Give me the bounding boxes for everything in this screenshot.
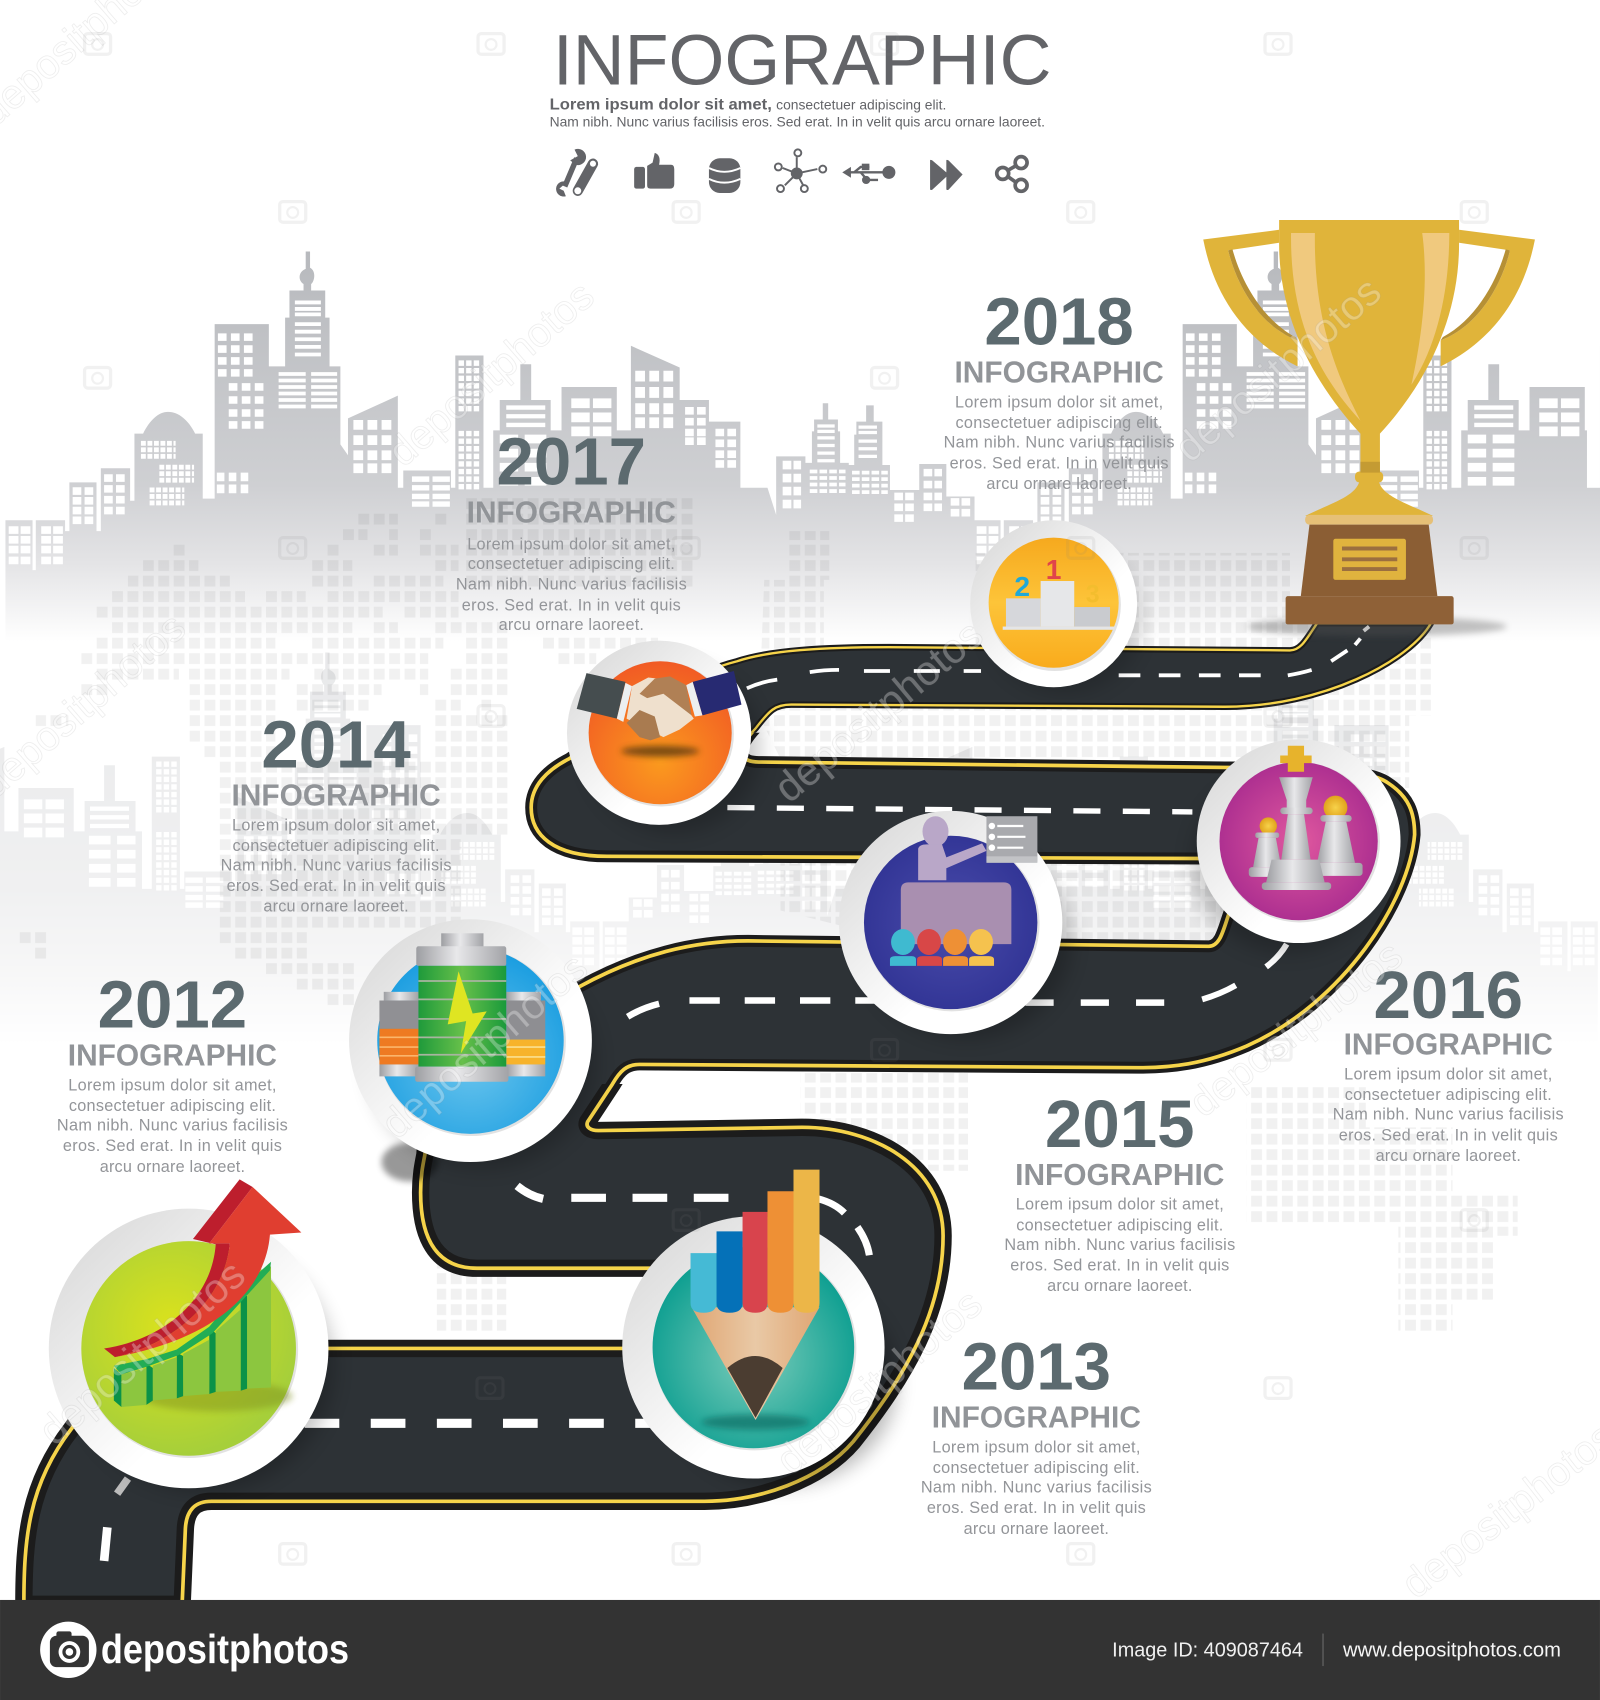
background: upper city skyline (5, 251, 1600, 642)
year 2014: 2014 (261, 707, 411, 782)
text block 2014: consectetuer adipiscing elit. (233, 837, 440, 855)
text block 2017: INFOGRAPHIC (467, 494, 676, 529)
text block 2014: Nam nibh. Nunc varius facilisis (221, 856, 452, 874)
text block 2013: arcu ornare laoreet. (964, 1520, 1109, 1538)
text block 2018: INFOGRAPHIC (954, 355, 1164, 390)
podium numbers: 1 (1046, 553, 1061, 585)
subtitle text: Lorem ipsum dolor sit amet, (550, 96, 772, 113)
icon row (556, 149, 1027, 197)
text block 2017: Nam nibh. Nunc varius facilisis (456, 576, 687, 594)
text block 2016: eros. Sed erat. In in velit quis (1339, 1126, 1558, 1144)
footer image id: Image ID: 409087464 (1112, 1639, 1303, 1661)
icon: share (997, 157, 1027, 191)
footer logo camera icon (40, 1622, 96, 1678)
text block 2018 (944, 285, 1175, 493)
presentation board (901, 882, 1011, 944)
footer website: www.depositphotos.com (1342, 1639, 1561, 1661)
icon: fast forward (930, 160, 963, 190)
text block 2012: consectetuer adipiscing elit. (69, 1097, 276, 1115)
stop 2014: battery (349, 919, 596, 1182)
text block 2016: consectetuer adipiscing elit. (1345, 1086, 1552, 1104)
stock photo watermarks: depositphotos (767, 1280, 991, 1483)
trophy (1203, 220, 1535, 636)
battery left (379, 992, 418, 1076)
text block 2014: INFOGRAPHIC (231, 777, 441, 812)
background: dotted world map (20, 496, 1518, 1333)
text block 2014: eros. Sed erat. In in velit quis (227, 877, 446, 895)
text block 2018: eros. Sed erat. In in velit quis (950, 454, 1169, 472)
text block 2013: INFOGRAPHIC (932, 1400, 1141, 1435)
year 2015: 2015 (1045, 1087, 1195, 1162)
icon: usb (842, 164, 895, 184)
text block 2018: consectetuer adipiscing elit. (956, 414, 1163, 432)
text block 2016 (1333, 958, 1564, 1165)
text block 2014: Lorem ipsum dolor sit amet, (232, 816, 440, 834)
podium numbers: 3 (1086, 581, 1100, 609)
trophy cup (1279, 220, 1459, 473)
trophy handles (1203, 230, 1535, 366)
stock photo watermarks: depositphotos (30, 1251, 254, 1454)
text block 2014: arcu ornare laoreet. (263, 898, 409, 916)
text block 2012: Nam nibh. Nunc varius facilisis (57, 1117, 288, 1135)
road lane markings (104, 627, 1369, 1561)
text block 2015: Nam nibh. Nunc varius facilisis (1004, 1236, 1235, 1254)
text block 2013: Lorem ipsum dolor sit amet, (932, 1439, 1140, 1457)
text block 2015: consectetuer adipiscing elit. (1016, 1216, 1223, 1234)
podium blocks (1003, 581, 1114, 630)
text block 2016: Nam nibh. Nunc varius facilisis (1333, 1106, 1564, 1124)
icon: thumbs up (634, 153, 674, 189)
stop 2015: teaching presenter (839, 811, 1071, 1038)
text block 2017 (456, 425, 687, 634)
clasped hands (627, 676, 694, 740)
road (24, 612, 1436, 1604)
trophy base and plaque (1286, 525, 1454, 624)
stock photo watermarks: depositphotos (1166, 268, 1390, 471)
stock photo watermarks: depositphotos (379, 272, 603, 475)
text block 2018: Lorem ipsum dolor sit amet, (955, 394, 1163, 412)
podium numbers (1014, 553, 1100, 609)
text block 2013: consectetuer adipiscing elit. (933, 1459, 1140, 1477)
icon: network nodes (775, 149, 826, 192)
text block 2015: arcu ornare laoreet. (1047, 1277, 1192, 1295)
text block 2017: consectetuer adipiscing elit. (468, 555, 675, 573)
trophy foot (1305, 462, 1433, 525)
text block 2016: arcu ornare laoreet. (1376, 1147, 1521, 1165)
text block 2012: INFOGRAPHIC (68, 1038, 277, 1073)
year 2017: 2017 (497, 425, 646, 500)
background: lower faint city skyline (0, 653, 1598, 1043)
text block 2015 (1004, 1087, 1235, 1295)
stock photo watermarks: depositphotos (372, 944, 596, 1147)
subtitle text (550, 96, 1045, 129)
pencil (692, 1307, 820, 1420)
chess pawn left (1249, 817, 1288, 877)
chess king (1262, 746, 1331, 890)
text block 2015: INFOGRAPHIC (1015, 1157, 1224, 1192)
checklist (986, 816, 1037, 863)
battery right (506, 992, 545, 1076)
stop 2013: pencil bar chart (622, 1170, 896, 1485)
text block 2013: Nam nibh. Nunc varius facilisis (921, 1479, 1152, 1497)
year 2016: 2016 (1373, 958, 1523, 1033)
text block 2016: Lorem ipsum dolor sit amet, (1344, 1066, 1552, 1084)
audience (890, 929, 994, 966)
subtitle text: Nam nibh. Nunc varius facilisis eros. Sed erat. In in velit quis arcu ornare laoreet. (550, 113, 1045, 129)
icon: database (709, 158, 740, 193)
suit cuffs (577, 671, 741, 722)
text block 2016: INFOGRAPHIC (1344, 1027, 1553, 1062)
year 2013: 2013 (962, 1330, 1111, 1405)
red arrow (104, 1179, 301, 1357)
text block 2018: arcu ornare laoreet. (986, 475, 1132, 493)
stop 2016: chess pieces (1192, 739, 1401, 953)
text block 2013 (921, 1330, 1152, 1538)
text block 2014 (221, 707, 452, 916)
icon: wrench and spanner (556, 149, 596, 197)
text block 2018: Nam nibh. Nunc varius facilisis (944, 434, 1175, 452)
text block 2013: eros. Sed erat. In in velit quis (927, 1499, 1146, 1517)
year 2018: 2018 (984, 285, 1134, 360)
stock photo watermarks: depositphotos (1180, 932, 1411, 1126)
text block 2012: arcu ornare laoreet. (100, 1158, 245, 1176)
text block 2012 (57, 968, 288, 1176)
green bars (114, 1262, 271, 1407)
pencil bars (691, 1170, 820, 1313)
chess pawn right (1309, 796, 1363, 876)
footer logo wordmark: depositphotos (101, 1626, 349, 1672)
subtitle text: consectetuer adipiscing elit. (776, 97, 946, 112)
presenter (918, 816, 986, 880)
text block 2017: eros. Sed erat. In in velit quis (462, 596, 681, 614)
year 2012: 2012 (98, 968, 247, 1043)
text block 2012: Lorem ipsum dolor sit amet, (68, 1076, 276, 1094)
stop 2018: podium (970, 520, 1143, 694)
text block 2015: eros. Sed erat. In in velit quis (1010, 1256, 1229, 1274)
title: INFOGRAPHIC (553, 22, 1051, 101)
text block 2017: Lorem ipsum dolor sit amet, (467, 536, 675, 554)
battery main (415, 933, 508, 1082)
text block 2017: arcu ornare laoreet. (499, 616, 644, 634)
stop 2017: handshake (567, 641, 761, 832)
stock photo watermarks: depositphotos (765, 611, 991, 811)
stop 2012: growth arrow (49, 1179, 334, 1492)
footer bar (0, 1600, 1600, 1700)
text block 2015: Lorem ipsum dolor sit amet, (1016, 1196, 1224, 1214)
podium numbers: 2 (1014, 570, 1030, 602)
text block 2012: eros. Sed erat. In in velit quis (63, 1137, 282, 1155)
